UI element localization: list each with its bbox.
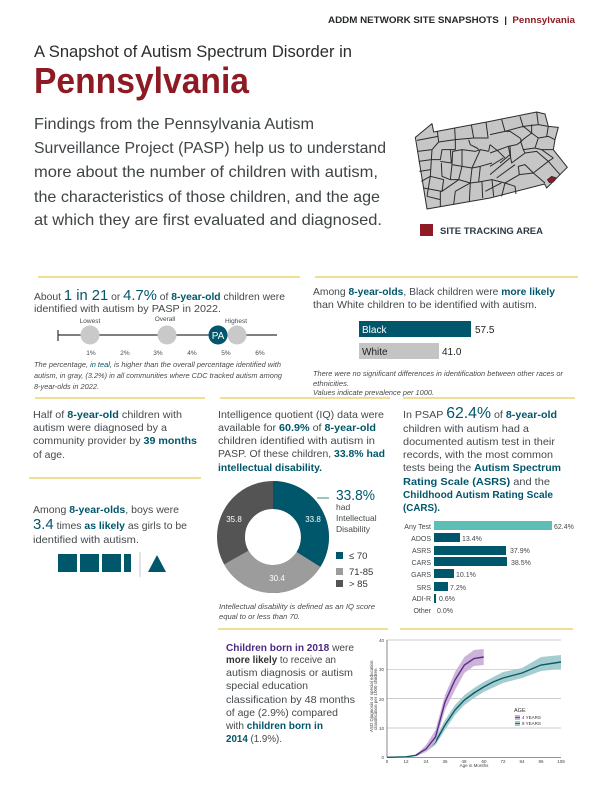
- test bar chart: ASRS: [412, 548, 431, 555]
- panel: prevalence: The percentage, in teal, is higher than the overall percentage identified with: [34, 362, 281, 369]
- donut callout: had: [336, 502, 350, 512]
- panel: birth cohort text: [225, 642, 355, 745]
- intro text: more about the number of children with autism,: [34, 164, 378, 181]
- panel: IQ data: children identified with autism in: [218, 435, 375, 447]
- panel: IQ data: Intelligence quotient (IQ) data were: [218, 409, 384, 421]
- test bar chart: 10.1%: [456, 572, 476, 579]
- prevalence number line: 4%: [187, 350, 197, 357]
- line chart: cumulative incidence: [369, 638, 565, 768]
- test bar chart: [404, 521, 574, 615]
- panel: race comparison: [313, 286, 564, 397]
- line chart: cumulative incidence: 10: [379, 726, 384, 731]
- donut chart: 35.8: [226, 515, 242, 524]
- donut legend: 71-85: [349, 567, 373, 578]
- panel: age of diagnosis: community provider by 39 months: [33, 435, 197, 447]
- line chart: cumulative incidence: 40: [379, 638, 384, 643]
- panel: age of diagnosis: autism were diagnosed by a: [33, 422, 167, 434]
- line chart: cumulative incidence: Age in Months: [460, 763, 489, 768]
- race bar chart: White: [362, 347, 388, 358]
- map legend: SITE TRACKING AREA: [440, 226, 544, 236]
- title: [34, 43, 352, 101]
- test bar chart: 38.5%: [511, 560, 531, 567]
- line chart: cumulative incidence: 108: [557, 759, 565, 764]
- line chart: cumulative incidence: ASD Diagnosis or special education: [369, 660, 374, 732]
- chart legend: 4 YEARS: [522, 715, 541, 720]
- panel: autism tests: Childhood Autism Rating Scale: [403, 489, 553, 501]
- panel: age of diagnosis: Half of 8-year-old children with: [33, 409, 182, 421]
- chart legend: [514, 708, 541, 726]
- test bar chart: 62.4%: [554, 524, 574, 531]
- test bar chart: Any Test: [404, 524, 431, 531]
- line chart: cumulative incidence: 48: [461, 759, 467, 764]
- test bar chart: 0.0%: [437, 608, 453, 615]
- prevalence number line: PA: [212, 331, 225, 342]
- panel: autism tests: (CARS).: [403, 502, 440, 514]
- donut callout: [317, 487, 377, 534]
- test bar chart: ADI-R: [412, 596, 431, 603]
- test bar chart: GARS: [411, 572, 431, 579]
- donut callout: Disability: [336, 524, 371, 534]
- prevalence number line: 2%: [120, 350, 130, 357]
- race bar chart: 41.0: [442, 347, 462, 358]
- panel: prevalence: [34, 287, 285, 391]
- map legend: [420, 224, 544, 236]
- line chart: cumulative incidence: 0: [386, 759, 389, 764]
- donut chart: [226, 495, 321, 583]
- line chart: cumulative incidence: 84: [519, 759, 525, 764]
- race bar chart: Black: [362, 325, 387, 336]
- map of Pennsylvania counties: [415, 112, 567, 209]
- prevalence number line: Overall: [155, 316, 176, 323]
- panel: race comparison: Among 8-year-olds, Black children were more likely: [313, 286, 555, 298]
- 4 years band and line: [416, 649, 484, 755]
- intro text: [34, 116, 386, 229]
- panel: IQ data: equal to or less than 70.: [219, 614, 300, 621]
- panel: sex ratio: 3.4 times as likely as girls to be: [33, 516, 187, 533]
- intro text: at which they are first evaluated and diagnosed.: [34, 212, 382, 229]
- panel: race comparison: ethnicities.: [313, 381, 349, 388]
- chart legend: 8 YEARS: [522, 721, 541, 726]
- prevalence number line: 6%: [255, 350, 265, 357]
- panel: birth cohort text: more likely to receive an: [226, 654, 336, 666]
- line chart: cumulative incidence: 12: [403, 759, 409, 764]
- prevalence number line: [58, 316, 277, 357]
- panel: birth cohort text: Children born in 2018 were: [226, 642, 354, 654]
- test bar chart: CARS: [412, 560, 431, 567]
- test bar chart: 0.6%: [439, 596, 455, 603]
- race bar chart: 57.5: [475, 325, 495, 336]
- prevalence number line: 5%: [221, 350, 231, 357]
- panel: autism tests: tests being the Autism Spectrum: [403, 462, 561, 474]
- test bar chart: 13.4%: [462, 536, 482, 543]
- panel: autism tests: documented autism test in their: [403, 436, 556, 448]
- panel: autism tests: [403, 405, 574, 615]
- intro text: Surveillance Project (PASP) help us to understand: [34, 140, 386, 157]
- prevalence number line: 1%: [86, 350, 96, 357]
- panel: race comparison: There were no significant differences in identification between other races or: [313, 371, 564, 378]
- donut legend: [336, 551, 373, 590]
- donut legend: > 85: [349, 579, 368, 590]
- donut callout: 33.8%: [336, 487, 375, 504]
- title: Pennsylvania: [34, 60, 250, 101]
- line chart: cumulative incidence: 96: [538, 759, 544, 764]
- panel: age of diagnosis: [33, 409, 197, 461]
- line chart: cumulative incidence: 0: [381, 755, 384, 760]
- panel: autism tests: children with autism had a: [403, 423, 529, 435]
- 8 years band and line: [387, 655, 561, 757]
- panel: autism tests: records, with the most common: [403, 449, 553, 461]
- panel: birth cohort text: of age (2.9%) compared: [226, 707, 338, 719]
- panel: birth cohort text: 2014 (1.9%).: [226, 733, 282, 745]
- panel: prevalence: autism, in gray, (3.2%) in all communities where CDC tracked autism among: [34, 373, 282, 380]
- icon: boys squares and girl triangle: [58, 552, 166, 577]
- line chart: cumulative incidence: classification per 1000 children: [373, 668, 378, 730]
- panel: IQ data: available for 60.9% of 8-year-old: [218, 422, 376, 434]
- panel: autism tests: Rating Scale (ASRS) and the: [403, 476, 550, 488]
- panel: birth cohort text: with children born in: [225, 720, 323, 732]
- panel: prevalence: About 1 in 21 or 4.7% of 8-year-old children were: [34, 287, 285, 304]
- test bar chart: SRS: [417, 585, 431, 592]
- panel: age of diagnosis: of age.: [33, 449, 65, 461]
- race bar chart: [359, 321, 495, 359]
- donut chart: 30.4: [269, 574, 285, 583]
- panel: race comparison: than White children to be identified with autism.: [313, 299, 537, 311]
- line chart: cumulative incidence: 60: [481, 759, 487, 764]
- intro text: Findings from the Pennsylvania Autism: [34, 116, 314, 133]
- chart legend: AGE: [514, 708, 526, 714]
- panel: sex ratio: identified with autism.: [33, 534, 139, 546]
- panel: IQ data: intellectual disability.: [218, 462, 322, 474]
- donut legend: ≤ 70: [349, 551, 367, 562]
- title: A Snapshot of Autism Spectrum Disorder in: [34, 43, 352, 61]
- prevalence number line: 3%: [153, 350, 163, 357]
- panel: sex ratio: Among 8-year-olds, boys were: [33, 504, 179, 516]
- panel: prevalence: identified with autism by PASP in 2022.: [34, 303, 221, 315]
- line chart: cumulative incidence: 30: [379, 667, 384, 672]
- line chart: cumulative incidence: 20: [379, 697, 384, 702]
- panel: autism tests: In PSAP 62.4% of 8-year-old: [403, 405, 557, 422]
- intro text: the characteristics of those children, and the age: [34, 189, 380, 206]
- line chart: cumulative incidence: 24: [423, 759, 429, 764]
- test bar chart: Other: [413, 608, 432, 615]
- panel: IQ data: PASP. Of these children, 33.8% had: [218, 448, 385, 460]
- prevalence number line: Lowest: [80, 318, 100, 325]
- test bar chart: 7.2%: [450, 585, 466, 592]
- panel: birth cohort text: autism diagnosis or autism: [226, 667, 353, 679]
- panel: sex ratio: [33, 504, 187, 577]
- panel: prevalence: 8-year-olds in 2022.: [34, 384, 99, 391]
- panel: race comparison: Values indicate prevalence per 1000.: [313, 390, 434, 397]
- donut callout: Intellectual: [336, 513, 377, 523]
- prevalence number line: Highest: [225, 318, 247, 325]
- test bar chart: 37.9%: [510, 548, 530, 555]
- header: ADDM NETWORK SITE SNAPSHOTS | Pennsylvania: [328, 15, 576, 25]
- line chart: cumulative incidence: 72: [500, 759, 506, 764]
- panel: IQ data: [218, 409, 385, 621]
- panel: birth cohort text: classification by 48 months: [226, 694, 355, 706]
- panel: IQ data: Intellectual disability is defined as an IQ score: [219, 604, 375, 611]
- test bar chart: ADOS: [411, 536, 431, 543]
- panel: birth cohort text: special education: [226, 680, 308, 692]
- line chart: cumulative incidence: 36: [442, 759, 448, 764]
- donut chart: 33.8: [305, 515, 321, 524]
